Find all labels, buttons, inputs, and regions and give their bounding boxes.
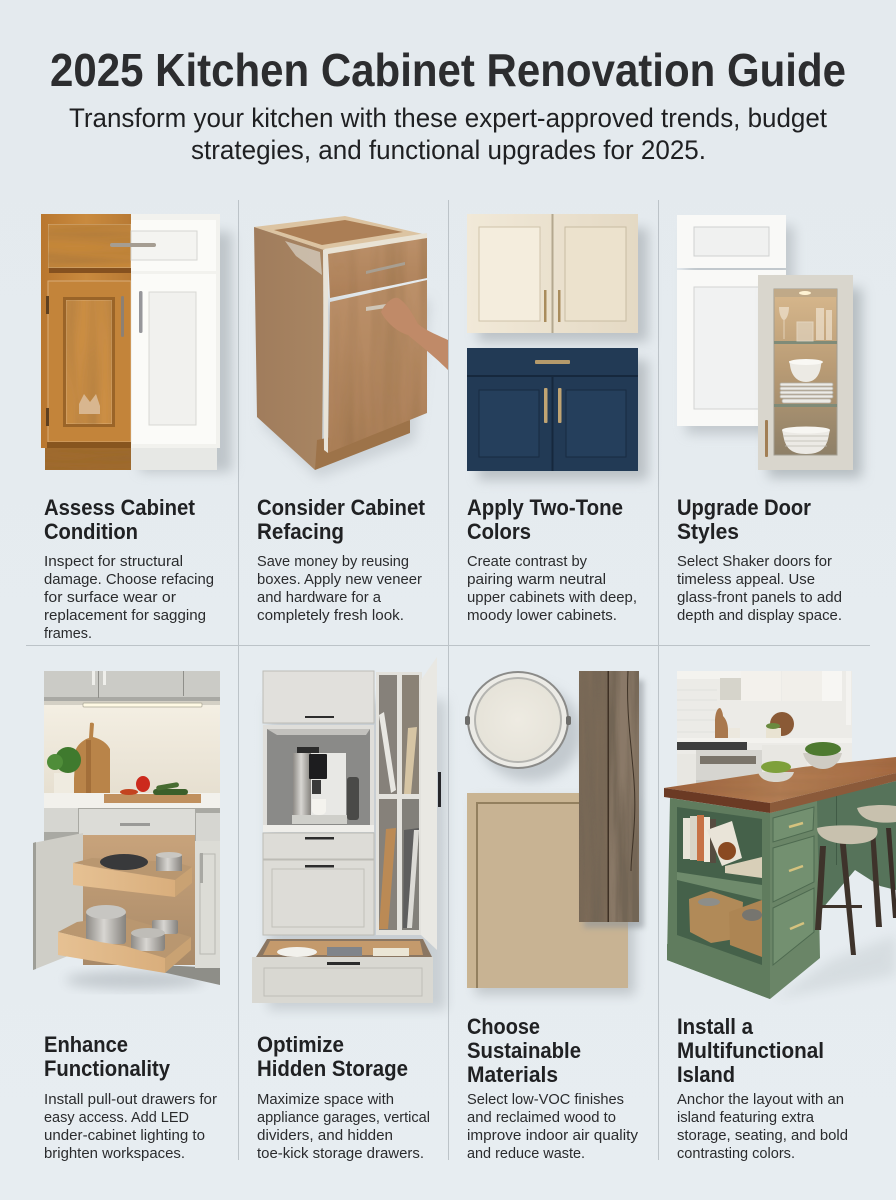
panel: choose sustainable materials xyxy=(465,671,644,1162)
heading: Colors xyxy=(467,519,531,544)
body text xyxy=(257,553,422,624)
body text xyxy=(677,553,842,624)
heading: Choose xyxy=(467,1014,540,1039)
heading xyxy=(677,495,811,544)
body text: upper cabinets with deep, xyxy=(467,589,637,606)
body text: for surface wear or xyxy=(44,589,176,606)
body text: Create contrast by xyxy=(467,553,587,570)
body text: Anchor the layout with an xyxy=(677,1091,844,1108)
heading: Optimize xyxy=(257,1032,344,1057)
body text: and reclaimed wood to xyxy=(467,1109,616,1126)
body text: under-cabinet lighting to xyxy=(44,1127,205,1144)
heading: Assess Cabinet xyxy=(44,495,196,520)
body text xyxy=(257,1091,430,1162)
body text: easy access. Add LED xyxy=(44,1109,189,1126)
heading: Multifunctional xyxy=(677,1038,824,1063)
body text: Select low-VOC finishes xyxy=(467,1091,624,1108)
body text xyxy=(44,1091,217,1162)
subtitle: strategies, and functional upgrades for 2025. xyxy=(191,135,706,165)
body text: glass-front panels to add xyxy=(677,589,842,606)
body text: and hardware for a xyxy=(257,589,382,606)
body text: appliance garages, vertical xyxy=(257,1109,430,1126)
body text: island featuring extra xyxy=(677,1109,815,1126)
panel: assess cabinet condition xyxy=(41,214,232,642)
body text: Select Shaker doors for xyxy=(677,553,832,570)
illustration: paint can, reclaimed wood and low-VOC sample xyxy=(465,671,644,995)
body text xyxy=(677,1091,848,1162)
body text: moody lower cabinets. xyxy=(467,607,617,624)
heading: Sustainable xyxy=(467,1038,581,1063)
title: 2025 Kitchen Cabinet Renovation Guide xyxy=(50,44,846,96)
heading xyxy=(44,1032,171,1081)
body text: Install pull-out drawers for xyxy=(44,1091,217,1108)
heading: Condition xyxy=(44,519,138,544)
subtitle xyxy=(69,103,827,165)
subtitle: Transform your kitchen with these expert-approved trends, budget xyxy=(69,103,827,133)
panel: upgrade door styles xyxy=(677,215,862,624)
heading xyxy=(44,495,196,544)
body text: Inspect for structural xyxy=(44,553,183,570)
illustration: half worn oak, half white cabinet xyxy=(41,214,232,472)
heading xyxy=(257,495,426,544)
panel: optimize hidden storage xyxy=(252,657,446,1162)
body text: toe-kick storage drawers. xyxy=(257,1145,424,1162)
heading xyxy=(257,1032,408,1081)
heading: Island xyxy=(677,1062,735,1087)
heading: Functionality xyxy=(44,1056,171,1081)
illustration: tall storage unit with appliance garage xyxy=(252,657,446,1010)
illustration: lower cabinet with pull-out drawers xyxy=(33,671,220,989)
illustration: cabinet box being refaced xyxy=(254,216,448,478)
body text: frames. xyxy=(44,625,92,642)
body text: dividers, and hidden xyxy=(257,1127,393,1144)
heading: Enhance xyxy=(44,1032,128,1057)
body text: timeless appeal. Use xyxy=(677,571,815,588)
heading: Apply Two-Tone xyxy=(467,495,623,520)
panel: consider cabinet refacing xyxy=(254,216,448,624)
heading: Styles xyxy=(677,519,739,544)
illustration: green island with butcher block top and stools xyxy=(664,671,896,1000)
heading xyxy=(467,1014,581,1087)
body text: boxes. Apply new veneer xyxy=(257,571,422,588)
body text: completely fresh look. xyxy=(257,607,404,624)
panel: enhance functionality xyxy=(33,671,220,1162)
heading: Hidden Storage xyxy=(257,1056,408,1081)
body text xyxy=(467,1091,639,1162)
heading: Upgrade Door xyxy=(677,495,811,520)
heading: Install a xyxy=(677,1014,754,1039)
body text: storage, seating, and bold xyxy=(677,1127,848,1144)
body text xyxy=(44,553,214,642)
body text: depth and display space. xyxy=(677,607,842,624)
heading: Consider Cabinet xyxy=(257,495,426,520)
heading xyxy=(677,1014,824,1087)
illustration: shaker door and glass-front door xyxy=(677,215,862,478)
body text: brighten workspaces. xyxy=(44,1145,185,1162)
body text: damage. Choose refacing xyxy=(44,571,214,588)
body text: contrasting colors. xyxy=(677,1145,795,1162)
illustration: cream uppers over navy lowers xyxy=(467,214,648,480)
body text: Maximize space with xyxy=(257,1091,394,1108)
body text: and reduce waste. xyxy=(467,1145,585,1162)
body text: pairing warm neutral xyxy=(467,571,606,588)
body text: Save money by reusing xyxy=(257,553,409,570)
body text: improve indoor air quality xyxy=(467,1127,639,1144)
body text xyxy=(467,553,637,624)
body text: replacement for sagging xyxy=(44,607,206,624)
heading xyxy=(467,495,623,544)
heading: Materials xyxy=(467,1062,558,1087)
panel: apply two-tone colors xyxy=(467,214,648,624)
panel: install a multifunctional island xyxy=(664,671,896,1162)
heading: Refacing xyxy=(257,519,344,544)
